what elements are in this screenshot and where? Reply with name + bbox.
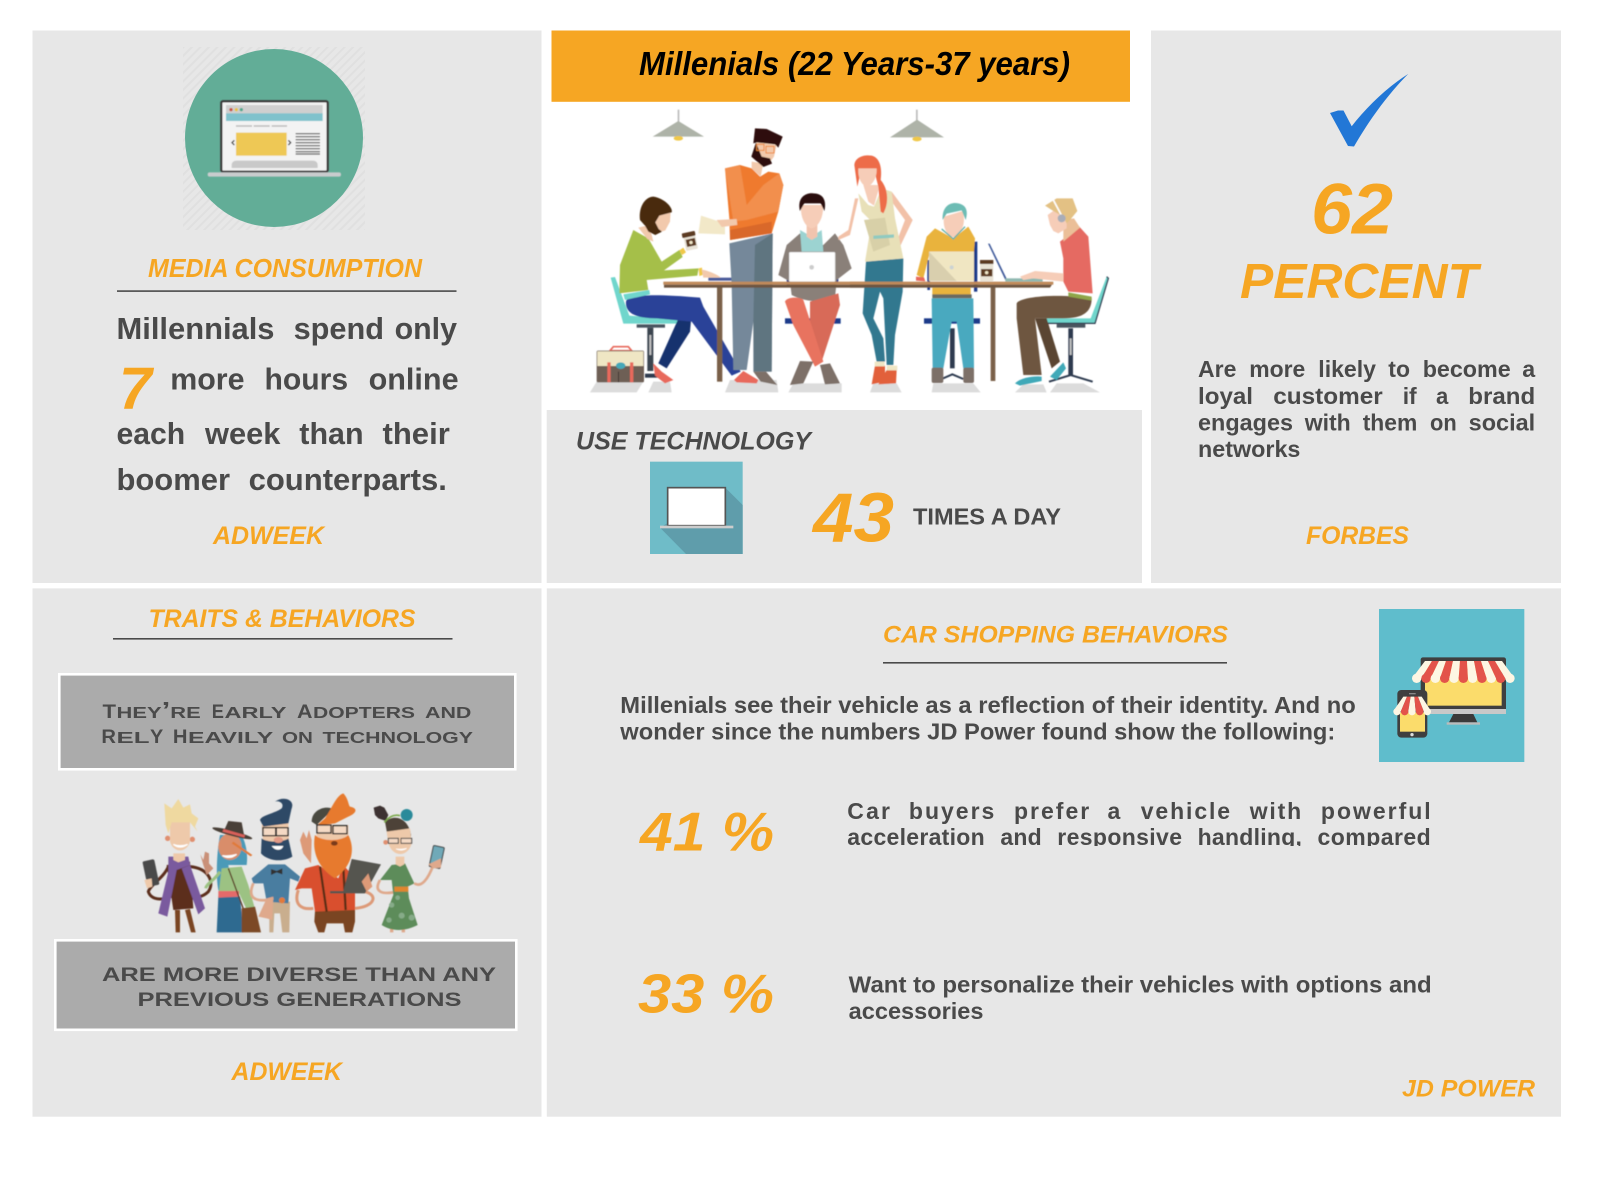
floor shadows xyxy=(870,383,1100,392)
text block: media statement xyxy=(116,311,459,497)
callout: early adopters: and xyxy=(425,697,471,723)
bag xyxy=(610,347,632,351)
text block: media statement: online xyxy=(369,362,459,397)
text block: loyalty statement: more xyxy=(1249,356,1305,382)
person 4 xyxy=(295,793,381,932)
standing man xyxy=(729,233,773,372)
panel: traits and behaviors xyxy=(32,588,542,1117)
text block: media statement: their xyxy=(382,416,450,451)
title banner: Millenials (22 Years-37 years) xyxy=(639,45,1070,82)
person 2 xyxy=(206,821,261,932)
text block: car buyers: powerful xyxy=(1321,798,1431,824)
laptop right xyxy=(988,244,1007,280)
text block: car buyers: handling, xyxy=(1198,824,1302,850)
illustration: diverse group of people xyxy=(142,793,444,932)
table xyxy=(717,287,722,382)
callout: early adopters: E xyxy=(212,702,224,723)
heading rule xyxy=(113,638,452,640)
callout: early adopters: hey’re xyxy=(116,697,201,723)
heading rule xyxy=(117,290,456,292)
cup xyxy=(980,261,993,281)
text block: loyalty statement: become xyxy=(1423,356,1511,382)
text block: loyalty statement: if xyxy=(1403,383,1417,409)
callout: early adopters xyxy=(59,674,515,769)
text block: personalize: accessories xyxy=(849,998,984,1024)
text block: media statement: counterparts. xyxy=(249,462,447,497)
illustration: team at table xyxy=(590,110,1108,392)
text block: media statement: more xyxy=(170,362,244,397)
text block: loyalty statement: with xyxy=(1304,410,1351,436)
heading: car shopping behaviors: CAR SHOPPING BEHAVIORS xyxy=(883,622,1228,649)
callout: early adopters: A xyxy=(297,702,313,723)
icon: check mark xyxy=(1330,74,1408,146)
panel: 62 percent xyxy=(1151,30,1561,583)
text block: loyalty statement: them xyxy=(1363,410,1417,436)
callout: more diverse: PREVIOUS GENERATIONS xyxy=(138,989,462,1011)
icon: laptop on teal square xyxy=(650,462,743,554)
icon: online shop xyxy=(1379,609,1524,762)
callout: early adopters: technology xyxy=(322,722,473,748)
text block: personalize xyxy=(849,971,1432,1024)
text block: loyalty statement: to xyxy=(1388,356,1410,382)
text block: car buyers: compared xyxy=(1318,824,1431,850)
green man legs xyxy=(658,313,692,368)
text block: intro xyxy=(619,692,1356,744)
callout: early adopters: R xyxy=(101,727,116,748)
text block: media statement: only xyxy=(395,311,458,346)
label: times a day: TIMES A DAY xyxy=(913,504,1061,530)
text block: car buyers xyxy=(848,802,1430,846)
right half of illustration xyxy=(838,110,1108,392)
callout: early adopters: eavily xyxy=(188,722,274,748)
callout: early adopters: arly xyxy=(224,697,287,723)
callout: early adopters: on xyxy=(282,722,313,748)
chair xyxy=(611,277,679,324)
lamp xyxy=(916,110,918,120)
callout: early adopters: H xyxy=(173,727,188,748)
text block: loyalty statement: a xyxy=(1522,356,1536,382)
heading: media consumption: MEDIA CONSUMPTION xyxy=(148,255,422,283)
text block: loyalty statement: loyal xyxy=(1198,383,1253,409)
green man torso xyxy=(619,230,699,293)
text block: car buyers: and xyxy=(1000,824,1042,850)
text block: car buyers: prefer xyxy=(1014,798,1089,824)
laptop on table, left xyxy=(745,241,757,280)
callout: early adopters: T xyxy=(102,702,116,723)
text block: media statement: Millennials xyxy=(116,311,274,346)
text block: loyalty statement: Are xyxy=(1198,356,1236,382)
stat: 41 percent: 41 % xyxy=(639,801,774,863)
text block: media statement: than xyxy=(299,416,364,451)
text block: car buyers: vehicle xyxy=(1141,798,1230,824)
chair middle man xyxy=(785,318,841,324)
text block: media statement: each xyxy=(116,416,185,451)
text block: intro: Millenials see their vehicle as a reflection of their identity. And no xyxy=(620,692,1356,718)
panel: media consumption xyxy=(32,30,542,583)
source: adweek: ADWEEK xyxy=(231,1058,344,1086)
chair right xyxy=(1040,277,1108,323)
text block: loyalty statement xyxy=(1198,356,1536,462)
number: 62: 62 xyxy=(1311,170,1393,250)
text block: loyalty statement: brand xyxy=(1468,383,1535,409)
number: 43: 43 xyxy=(811,478,894,556)
chair of hoodie man xyxy=(924,318,980,324)
heading: traits and behaviors: TRAITS & BEHAVIORS xyxy=(148,605,416,633)
text block: car buyers: responsive xyxy=(1057,824,1182,850)
heading rule xyxy=(883,662,1227,664)
table xyxy=(991,287,995,381)
text block: car buyers: acceleration xyxy=(847,824,985,850)
text block: loyalty statement: a xyxy=(1436,383,1449,409)
text block: loyalty statement: engages xyxy=(1198,410,1293,436)
coffee cup xyxy=(682,231,698,251)
hoodie man xyxy=(917,227,975,278)
text block: loyalty statement: social xyxy=(1469,410,1535,436)
icon: laptop in green circle xyxy=(183,47,365,230)
text block: car buyers: with xyxy=(1249,798,1301,824)
headphone man xyxy=(1035,318,1060,368)
title banner xyxy=(552,30,1130,102)
left half of illustration xyxy=(590,110,890,392)
text block: personalize: Want to personalize their vehicles with options and xyxy=(849,971,1432,997)
number: 7: 7 xyxy=(119,356,155,422)
source: adweek: ADWEEK xyxy=(212,522,326,550)
person 5 xyxy=(374,806,444,932)
text block: media statement: week xyxy=(204,416,281,451)
green man head xyxy=(638,225,653,242)
callout: early adopters: Y xyxy=(150,727,164,748)
text block: media statement: spend xyxy=(294,311,384,346)
middle man xyxy=(778,233,852,301)
panel: car shopping behaviors xyxy=(547,588,1561,1117)
source: jd power: JD POWER xyxy=(1402,1077,1535,1103)
paper xyxy=(698,216,725,234)
person 3 xyxy=(251,799,300,932)
label: percent: PERCENT xyxy=(1240,255,1482,309)
text block: loyalty statement: likely xyxy=(1318,356,1376,382)
floor shadows xyxy=(590,380,842,392)
lamp xyxy=(678,110,679,122)
source: forbes: FORBES xyxy=(1306,522,1409,550)
callout: more diverse: ARE MORE DIVERSE THAN ANY xyxy=(102,964,496,986)
text block: loyalty statement: on xyxy=(1430,410,1457,436)
text block: intro: wonder since the numbers JD Power found show the following: xyxy=(619,718,1335,744)
text block: car buyers: buyers xyxy=(909,798,994,824)
woman xyxy=(887,192,913,249)
text block: loyalty statement: customer xyxy=(1273,383,1383,409)
callout: early adopters: el xyxy=(116,722,150,748)
callout: more diverse xyxy=(55,940,516,1030)
text block: car buyers: a xyxy=(1108,798,1120,824)
person 1 xyxy=(142,799,213,932)
stat: 33 percent: 33 % xyxy=(638,963,774,1025)
text block: media statement: hours xyxy=(264,362,348,397)
panel: use technology xyxy=(547,410,1142,583)
text block: loyalty statement: networks xyxy=(1198,436,1300,462)
text block: media statement: boomer xyxy=(116,462,230,497)
text block: car buyers: Car xyxy=(847,798,890,824)
callout: early adopters: dopters xyxy=(313,697,415,723)
heading: use technology: USE TECHNOLOGY xyxy=(576,428,813,456)
